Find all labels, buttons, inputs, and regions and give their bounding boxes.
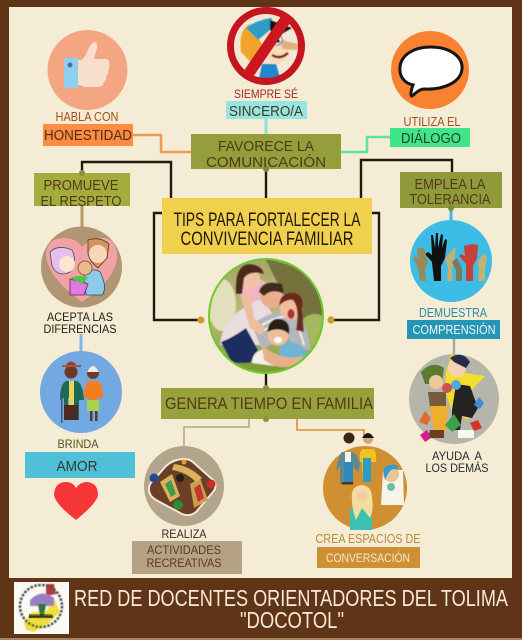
- connector: sincero: [264, 119, 268, 134]
- text: brinda: BRINDA: [58, 437, 98, 451]
- box: comprension: COMPRENSIÓN: [412, 322, 496, 337]
- box: promueve: PROMUEVE: [44, 177, 118, 194]
- box: favorece: COMUNICACIÓN: [206, 154, 326, 171]
- icon: board game: [144, 446, 224, 526]
- box: favorece: [191, 134, 341, 172]
- box: actividades: RECREATIVAS: [146, 556, 222, 570]
- connector: honestidad: [133, 135, 191, 152]
- dad body: [220, 298, 278, 345]
- box: actividades: [132, 541, 242, 574]
- text: ayuda a los demas: AYUDA A: [432, 449, 482, 463]
- connector: actividades: [184, 419, 249, 447]
- family photo: [208, 258, 324, 374]
- boy: [279, 341, 308, 360]
- box: actividades: ACTIVIDADES: [147, 543, 221, 557]
- icon: no pinocchio: [229, 9, 303, 84]
- connectors black: [82, 160, 452, 388]
- ball and arm: [252, 350, 275, 366]
- icon: heart: [54, 482, 98, 520]
- dad head: [260, 290, 284, 308]
- text: demuestra: DEMUESTRA: [419, 306, 488, 320]
- box: emplea: TOLERANCIA: [410, 191, 490, 208]
- text: acepta las diferencias: DIFERENCIAS: [44, 322, 116, 336]
- footer logo: DOCOTOL: [29, 614, 54, 620]
- icon: conversation people: [323, 432, 407, 530]
- footer logo: [14, 582, 69, 634]
- box: comprension: [407, 320, 500, 339]
- text: acepta las diferencias: [44, 310, 116, 336]
- icon: family heart: [41, 226, 122, 308]
- text: ayuda a los demas: [426, 449, 488, 475]
- box: promueve: EL RESPETO: [40, 193, 122, 210]
- box: promueve: [34, 170, 130, 210]
- connector: tolerancia: [450, 208, 452, 222]
- box: amor: AMOR: [56, 458, 98, 475]
- title box: TIPS PARA FORTALECER LA: [174, 210, 361, 231]
- icon: thumbs up: [48, 30, 128, 110]
- box: genera: GENERA TIEMPO EN FAMILIA: [165, 395, 373, 413]
- junction dots: [197, 316, 335, 324]
- title box: [162, 198, 372, 254]
- text: ayuda a los demas: LOS DEMÁS: [426, 460, 488, 475]
- text: siempre se: SIEMPRE SÉ: [234, 86, 298, 101]
- mom striped body: [252, 311, 311, 350]
- title box: CONVIVENCIA FAMILIAR: [180, 229, 354, 250]
- box: conversacion: CONVERSACIÓN: [326, 550, 410, 565]
- box: conversacion: [317, 547, 420, 568]
- connector: diferencias: [80, 334, 82, 353]
- icon: hands: [410, 220, 492, 302]
- box: honestidad: HONESTIDAD: [44, 127, 132, 144]
- footer title: "DOCOTOL": [240, 607, 344, 633]
- box: emplea: EMPLEA LA: [414, 176, 486, 193]
- connector: respeto: [80, 206, 84, 228]
- footer title: [74, 585, 509, 633]
- box: favorece: FAVORECE LA: [218, 138, 314, 155]
- bottom edge line: [0, 638, 522, 640]
- icon: kids and stars: [409, 352, 499, 444]
- connector: conversacion: [297, 419, 364, 436]
- box: amor: [25, 452, 135, 478]
- icon: speech bubble: [391, 31, 469, 109]
- mom head: [280, 296, 302, 320]
- connector: dialogo: [341, 137, 390, 152]
- connector: comprension: [453, 339, 455, 356]
- box: genera: [161, 385, 374, 422]
- text: realiza: REALIZA: [162, 527, 206, 541]
- text: utiliza el: UTILIZA EL: [404, 115, 461, 129]
- text: habla con: HABLA CON: [56, 110, 118, 124]
- girl: [241, 278, 266, 303]
- text: crea espacios: CREA ESPACIOS DE: [316, 532, 420, 546]
- box: dialogo: DIÁLOGO: [401, 130, 461, 147]
- box: sincero: SINCERO/A: [229, 103, 303, 120]
- icon: elderly couple: [40, 351, 122, 433]
- box: emplea: [400, 172, 502, 211]
- text: acepta las diferencias: ACEPTA LAS: [47, 310, 113, 324]
